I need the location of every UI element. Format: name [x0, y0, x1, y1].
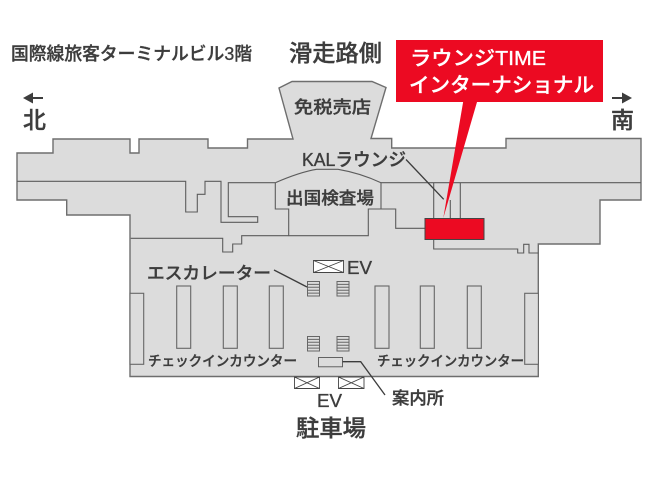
building outline: [17, 82, 641, 376]
south direction: 南: [611, 107, 634, 133]
label: check-in counter right: チェックインカウンター: [377, 353, 524, 369]
label: information: 案内所: [392, 389, 444, 408]
leader lines: [274, 160, 444, 395]
escalators: [308, 282, 349, 351]
lounge location: [425, 218, 484, 240]
callout: Lounge TIME International: ラウンジTIME: [410, 48, 546, 70]
label: departure inspection: 出国検査場: [286, 189, 374, 208]
interior walls: [17, 169, 641, 253]
north direction: 北: [23, 107, 46, 133]
label: check-in counter left: チェックインカウンター: [148, 353, 297, 369]
south direction: [611, 92, 634, 133]
north direction: [23, 92, 46, 133]
elevators: [294, 260, 364, 388]
callout: Lounge TIME International: [396, 40, 603, 218]
information desk: [318, 358, 342, 367]
label: escalator: エスカレーター: [147, 264, 271, 283]
label: KAL lounge: KALラウンジ: [302, 150, 406, 170]
heading: runway side: 滑走路側: [289, 40, 382, 66]
label: parking: 駐車場: [296, 415, 366, 441]
label: top EV: EV: [347, 258, 372, 278]
title: 国際線旅客ターミナルビル3階: [11, 44, 252, 64]
terminal floor plan: [17, 82, 641, 388]
check-in counters: [130, 286, 538, 364]
label: bottom EV: EV: [317, 391, 342, 411]
label: duty free shop: 免税売店: [294, 98, 371, 117]
callout: Lounge TIME International: インターナショナル: [409, 74, 594, 97]
